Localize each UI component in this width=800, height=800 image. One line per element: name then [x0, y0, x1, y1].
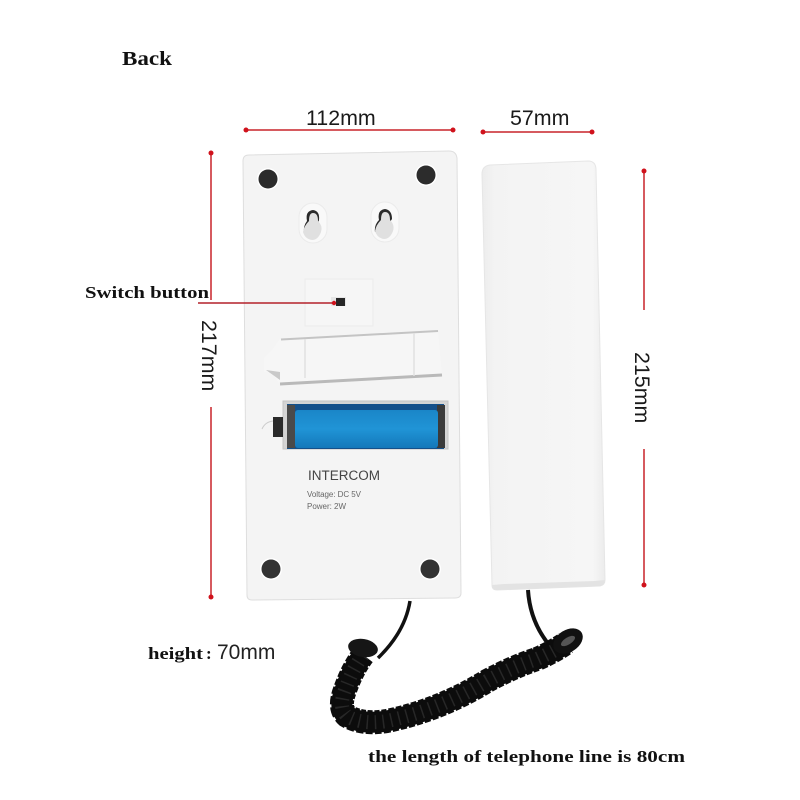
rubber foot: top left	[257, 168, 279, 190]
coil core	[342, 643, 566, 722]
dimension: width 112mm	[244, 106, 456, 132]
callout: switch button: Switch button	[85, 283, 210, 302]
label: height 70mm: 70mm	[217, 641, 275, 664]
dimension: handset height 215mm: 215mm	[630, 352, 654, 423]
coil highlights	[342, 643, 566, 722]
callout: switch button	[85, 283, 336, 305]
keyhole: left	[299, 203, 327, 243]
rating label: INTERCOM	[308, 468, 380, 483]
rubber foot: top right	[415, 164, 437, 186]
base body	[243, 151, 461, 600]
bottom bevel	[492, 580, 605, 590]
intercom base, back side	[243, 151, 461, 600]
battery cover, removed	[264, 331, 442, 385]
cord wire from base	[378, 601, 410, 658]
coil end, base side	[347, 637, 379, 659]
coiled telephone cord	[342, 590, 587, 722]
switch button	[331, 297, 346, 306]
rating label: Power: 2W	[307, 502, 346, 511]
dimension: base height 217mm: 217mm	[197, 320, 221, 391]
label: height 70mm: height	[148, 644, 204, 663]
rating label	[307, 468, 380, 511]
dimension: base height 217mm	[197, 150, 221, 600]
keyhole: right	[371, 202, 399, 242]
cord wire from handset	[528, 590, 550, 646]
handset	[482, 161, 605, 590]
label: height 70mm	[148, 641, 275, 664]
dimension: width 112mm: 112mm	[306, 106, 376, 130]
coil outer ridges	[342, 643, 566, 722]
rating label: Voltage: DC 5V	[307, 490, 362, 499]
battery compartment	[262, 401, 448, 449]
label: cord length: the length of telephone line is 80cm	[368, 747, 685, 766]
dimension: width 57mm: 57mm	[510, 106, 569, 130]
label: height 70mm: :	[206, 644, 212, 663]
battery	[295, 410, 438, 448]
coil end, handset side	[549, 623, 587, 659]
rubber foot: bottom left	[260, 558, 282, 580]
dimension: width 57mm	[480, 106, 594, 134]
dimension: handset height 215mm	[630, 168, 654, 588]
title: Back: Back	[122, 48, 173, 70]
rubber foot: bottom right	[419, 558, 441, 580]
battery wire	[262, 417, 283, 437]
switch recess panel	[305, 279, 373, 326]
